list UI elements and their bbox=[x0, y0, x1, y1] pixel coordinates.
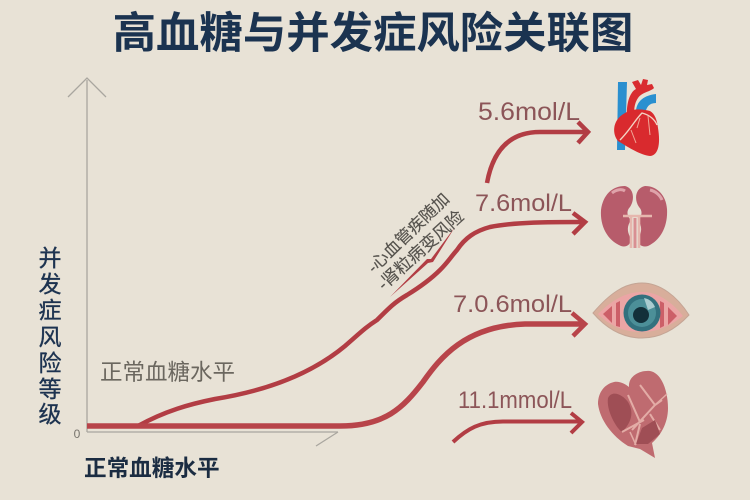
icon: kidneys bbox=[601, 186, 667, 248]
thin annotation line bbox=[390, 227, 455, 297]
value label 5.6: 5.6mol/L bbox=[478, 98, 580, 126]
y axis label: 级 bbox=[38, 401, 62, 427]
y axis label: 险 bbox=[38, 350, 62, 376]
value label 11.1: 11.1mmol/L bbox=[458, 387, 572, 414]
annotation: rotated risk text: -肾粒病变风险 bbox=[373, 206, 468, 294]
x axis label: 正常血糖水平 bbox=[84, 456, 220, 481]
icon: eye bbox=[593, 283, 689, 338]
origin zero label: 0 bbox=[74, 427, 81, 441]
annotation: rotated risk text: -心血管疾随加 bbox=[364, 189, 453, 277]
value label 7.0.6: 7.0.6mol/L bbox=[453, 291, 572, 318]
y axis label: 发 bbox=[38, 271, 62, 297]
y axis label bbox=[38, 245, 62, 427]
curve: upper risk curve to 7.6 bbox=[138, 213, 585, 426]
icon: heart bbox=[614, 79, 659, 156]
y axis label: 等 bbox=[38, 376, 62, 402]
title: 高血糖与并发症风险关联图 bbox=[113, 10, 633, 58]
curve: baseline to 7.0.6 bbox=[87, 313, 585, 426]
y axis label: 症 bbox=[38, 297, 62, 323]
normal level label: 正常血糖水平 bbox=[100, 360, 235, 385]
value label 7.6: 7.6mol/L bbox=[475, 190, 572, 217]
curve: 11.1 arrow bbox=[453, 413, 582, 442]
chart axes bbox=[68, 78, 338, 446]
y axis label: 风 bbox=[38, 324, 62, 350]
curve: 5.6 arrow bbox=[487, 122, 588, 183]
y axis label: 并 bbox=[38, 245, 62, 271]
icon: damaged organ bbox=[598, 371, 668, 458]
